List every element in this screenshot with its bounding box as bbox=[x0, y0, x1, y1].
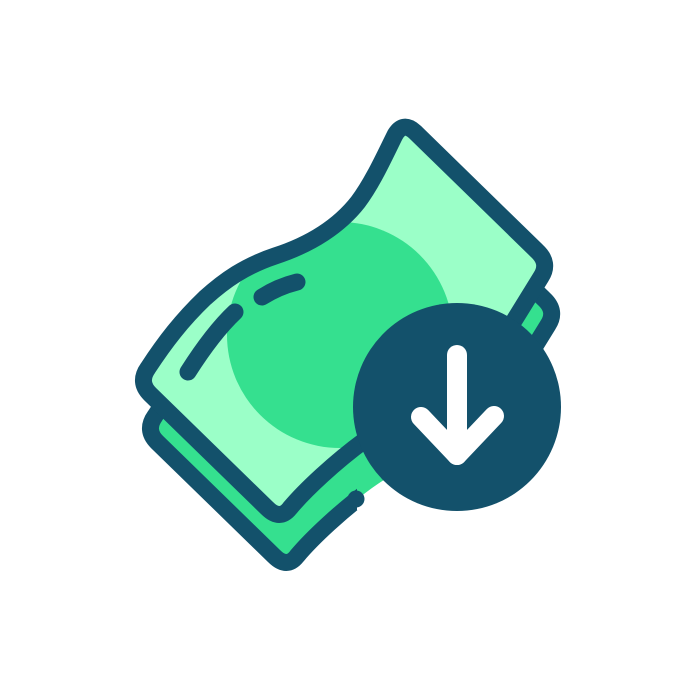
download badge bbox=[353, 303, 561, 511]
bill center circle bbox=[227, 222, 453, 448]
back bill bbox=[142, 288, 560, 571]
dashes bbox=[188, 282, 297, 372]
front bill bbox=[143, 127, 545, 514]
arrow bbox=[421, 355, 494, 455]
icon: money download bbox=[134, 118, 561, 571]
